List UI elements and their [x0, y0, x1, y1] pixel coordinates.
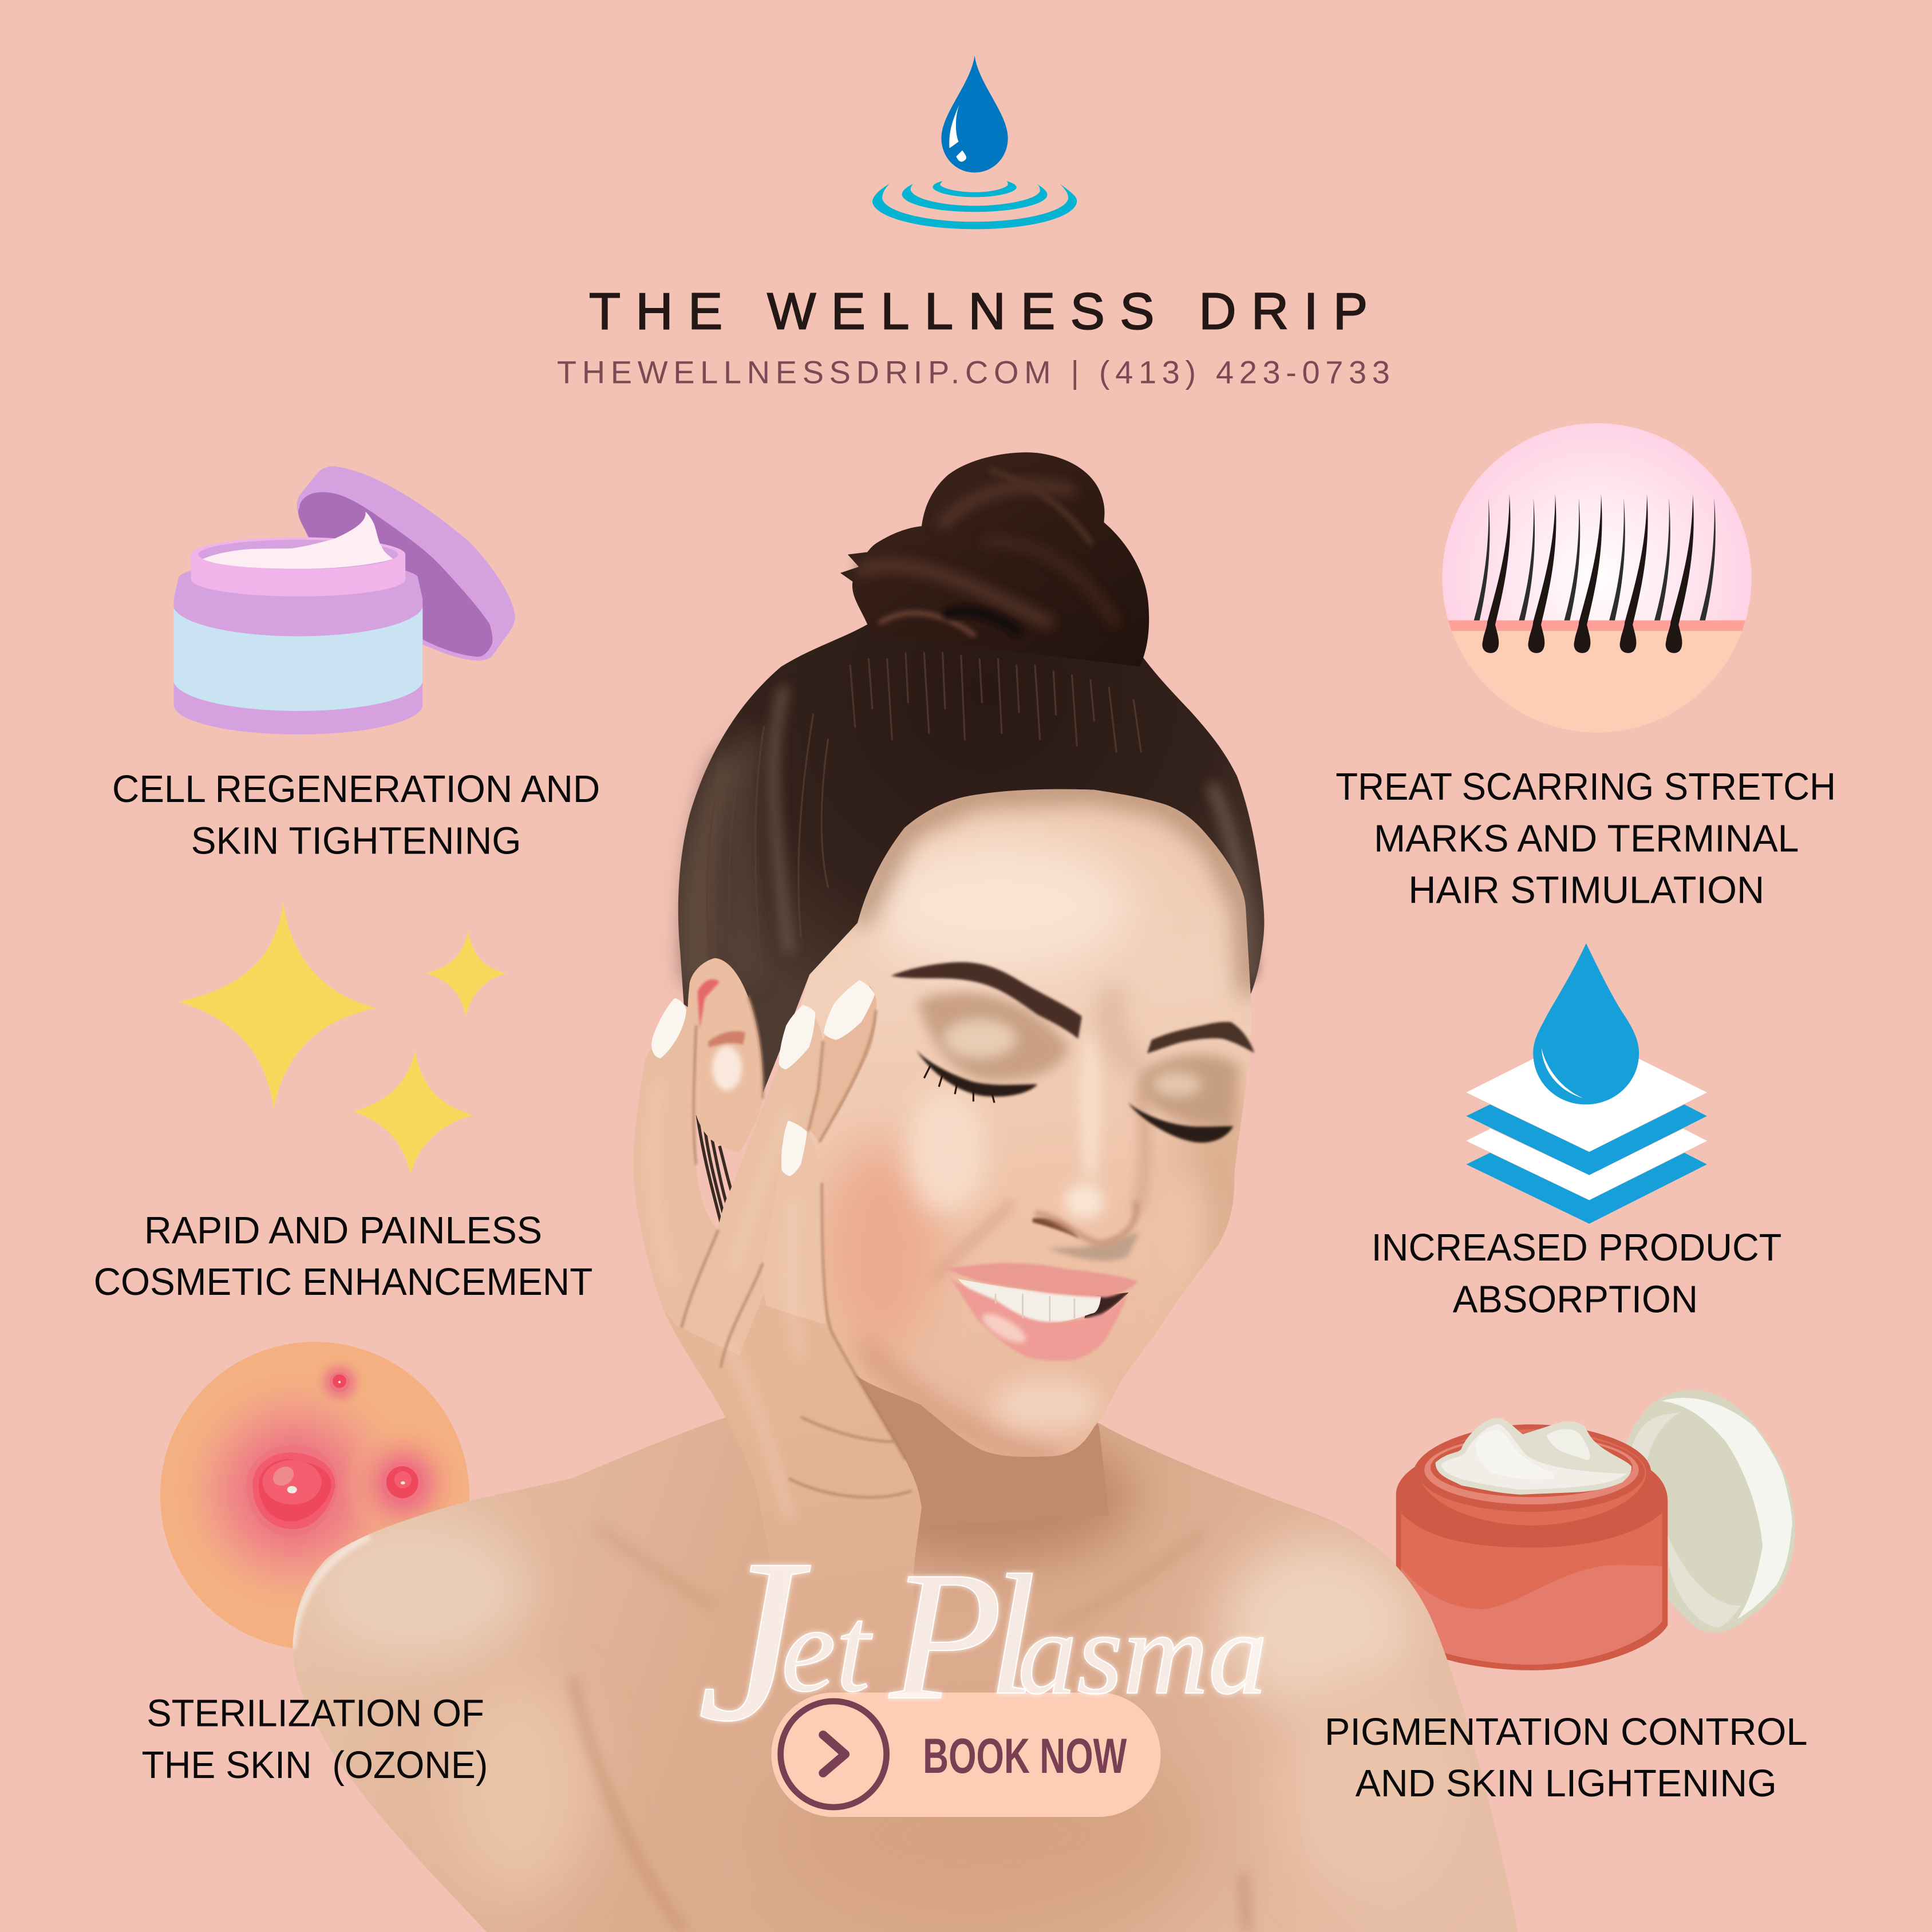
woman: shoulders and chest — [283, 1405, 1528, 1932]
woman: index finger — [808, 986, 876, 1142]
label: cell regeneration: SKIN TIGHTENING — [191, 820, 521, 863]
title: THE WELLNESS DRIP — [589, 283, 1368, 341]
woman: photo illustration — [283, 452, 1528, 1932]
script title: Jet Plasma: J — [697, 1511, 811, 1770]
woman: upper lip — [946, 1263, 1139, 1298]
label: sterilization — [142, 1693, 488, 1787]
label: scarring and hair: HAIR STIMULATION — [1408, 870, 1764, 912]
woman: bun tuft — [840, 552, 868, 582]
woman: nose shadow — [1046, 1232, 1140, 1261]
label: scarring and hair: MARKS AND TERMINAL — [1374, 817, 1799, 860]
script title: Jet Plasma: l — [988, 1539, 1036, 1730]
woman: fingernails — [651, 980, 875, 1176]
label: product absorption — [1372, 1227, 1781, 1321]
icon: yellow sparkles — [179, 902, 507, 1174]
woman: left lash hairs — [924, 1066, 994, 1103]
woman: right eyebrow — [1147, 1022, 1254, 1053]
woman: lower lip — [950, 1278, 1128, 1361]
woman: left eyelashes — [916, 1050, 1037, 1097]
woman: hand — [633, 980, 922, 1688]
label: pigmentation — [1325, 1711, 1808, 1805]
script title: Jet Plasma: et — [781, 1581, 873, 1717]
woman: dark mouth interior — [1084, 1293, 1129, 1318]
label: scarring and hair: TREAT SCARRING STRETCH — [1336, 766, 1836, 808]
icon: hair follicles — [1441, 422, 1752, 734]
icon: layered skin with drop — [1466, 943, 1707, 1224]
label: pigmentation: AND SKIN LIGHTENING — [1356, 1763, 1777, 1805]
woman: eyeshadow right — [1140, 1055, 1239, 1127]
label: painless enhancement: RAPID AND PAINLESS — [144, 1210, 542, 1252]
label: painless enhancement — [94, 1210, 592, 1303]
logo: water drop with ripples — [872, 56, 1077, 229]
woman: nose underside — [1035, 1202, 1137, 1243]
button label: BOOK NOW — [923, 1729, 1127, 1784]
woman: finger highlights — [653, 1084, 801, 1515]
book now button — [771, 1693, 1161, 1817]
label: product absorption: ABSORPTION — [1453, 1278, 1698, 1321]
woman: palm and wrist — [664, 1183, 922, 1688]
woman: face — [776, 776, 1269, 1466]
woman: eyeshadow highlight right — [1152, 1072, 1202, 1097]
woman: left eyebrow — [891, 962, 1082, 1038]
woman: ear — [688, 958, 763, 1152]
icon: purple cream jar — [173, 467, 515, 734]
woman: teeth — [958, 1279, 1101, 1324]
icon: inflamed skin circle — [160, 1342, 469, 1650]
woman: right eyelashes — [1128, 1103, 1233, 1143]
woman: hair — [678, 604, 1264, 1121]
woman: little finger — [633, 1001, 718, 1331]
woman: hair bun — [852, 452, 1149, 666]
woman: lips and smile — [946, 1263, 1139, 1361]
label: sterilization: THE SKIN (OZONE) — [142, 1744, 488, 1787]
label: product absorption: INCREASED PRODUCT — [1372, 1227, 1781, 1269]
woman: nostril — [1033, 1218, 1080, 1238]
label: painless enhancement: COSMETIC ENHANCEMENT — [94, 1261, 592, 1303]
button chevron — [823, 1735, 846, 1773]
label: scarring and hair — [1336, 766, 1836, 912]
woman: hair strands behind hand — [697, 1115, 732, 1222]
woman: middle finger — [762, 1123, 825, 1325]
label: cell regeneration: CELL REGENERATION AND — [112, 768, 600, 811]
woman: lower face smile fold — [933, 1202, 1013, 1282]
woman: neck — [823, 1318, 1109, 1528]
script title: Jet Plasma: P — [887, 1533, 1002, 1738]
woman: lip highlight — [978, 1309, 1030, 1348]
icon: coral cream jar with open lid — [1396, 1390, 1795, 1670]
woman: eyeshadow highlight left — [943, 1019, 1017, 1058]
woman: eyeshadow left — [918, 993, 1069, 1081]
woman: ring finger — [681, 1008, 824, 1356]
label: cell regeneration — [112, 768, 600, 863]
contact line: THEWELLNESSDRIP.COM | (413) 423-0733 — [557, 354, 1390, 390]
woman: tooth separators — [995, 1294, 1074, 1322]
label: pigmentation: PIGMENTATION CONTROL — [1325, 1711, 1808, 1753]
label: sterilization: STERILIZATION OF — [147, 1693, 484, 1735]
button arrow icon — [781, 1701, 887, 1807]
script title: Jet Plasma: asma — [1018, 1587, 1267, 1718]
woman: finger crease lines — [681, 1010, 912, 1498]
woman: hair highlights — [697, 471, 1251, 986]
